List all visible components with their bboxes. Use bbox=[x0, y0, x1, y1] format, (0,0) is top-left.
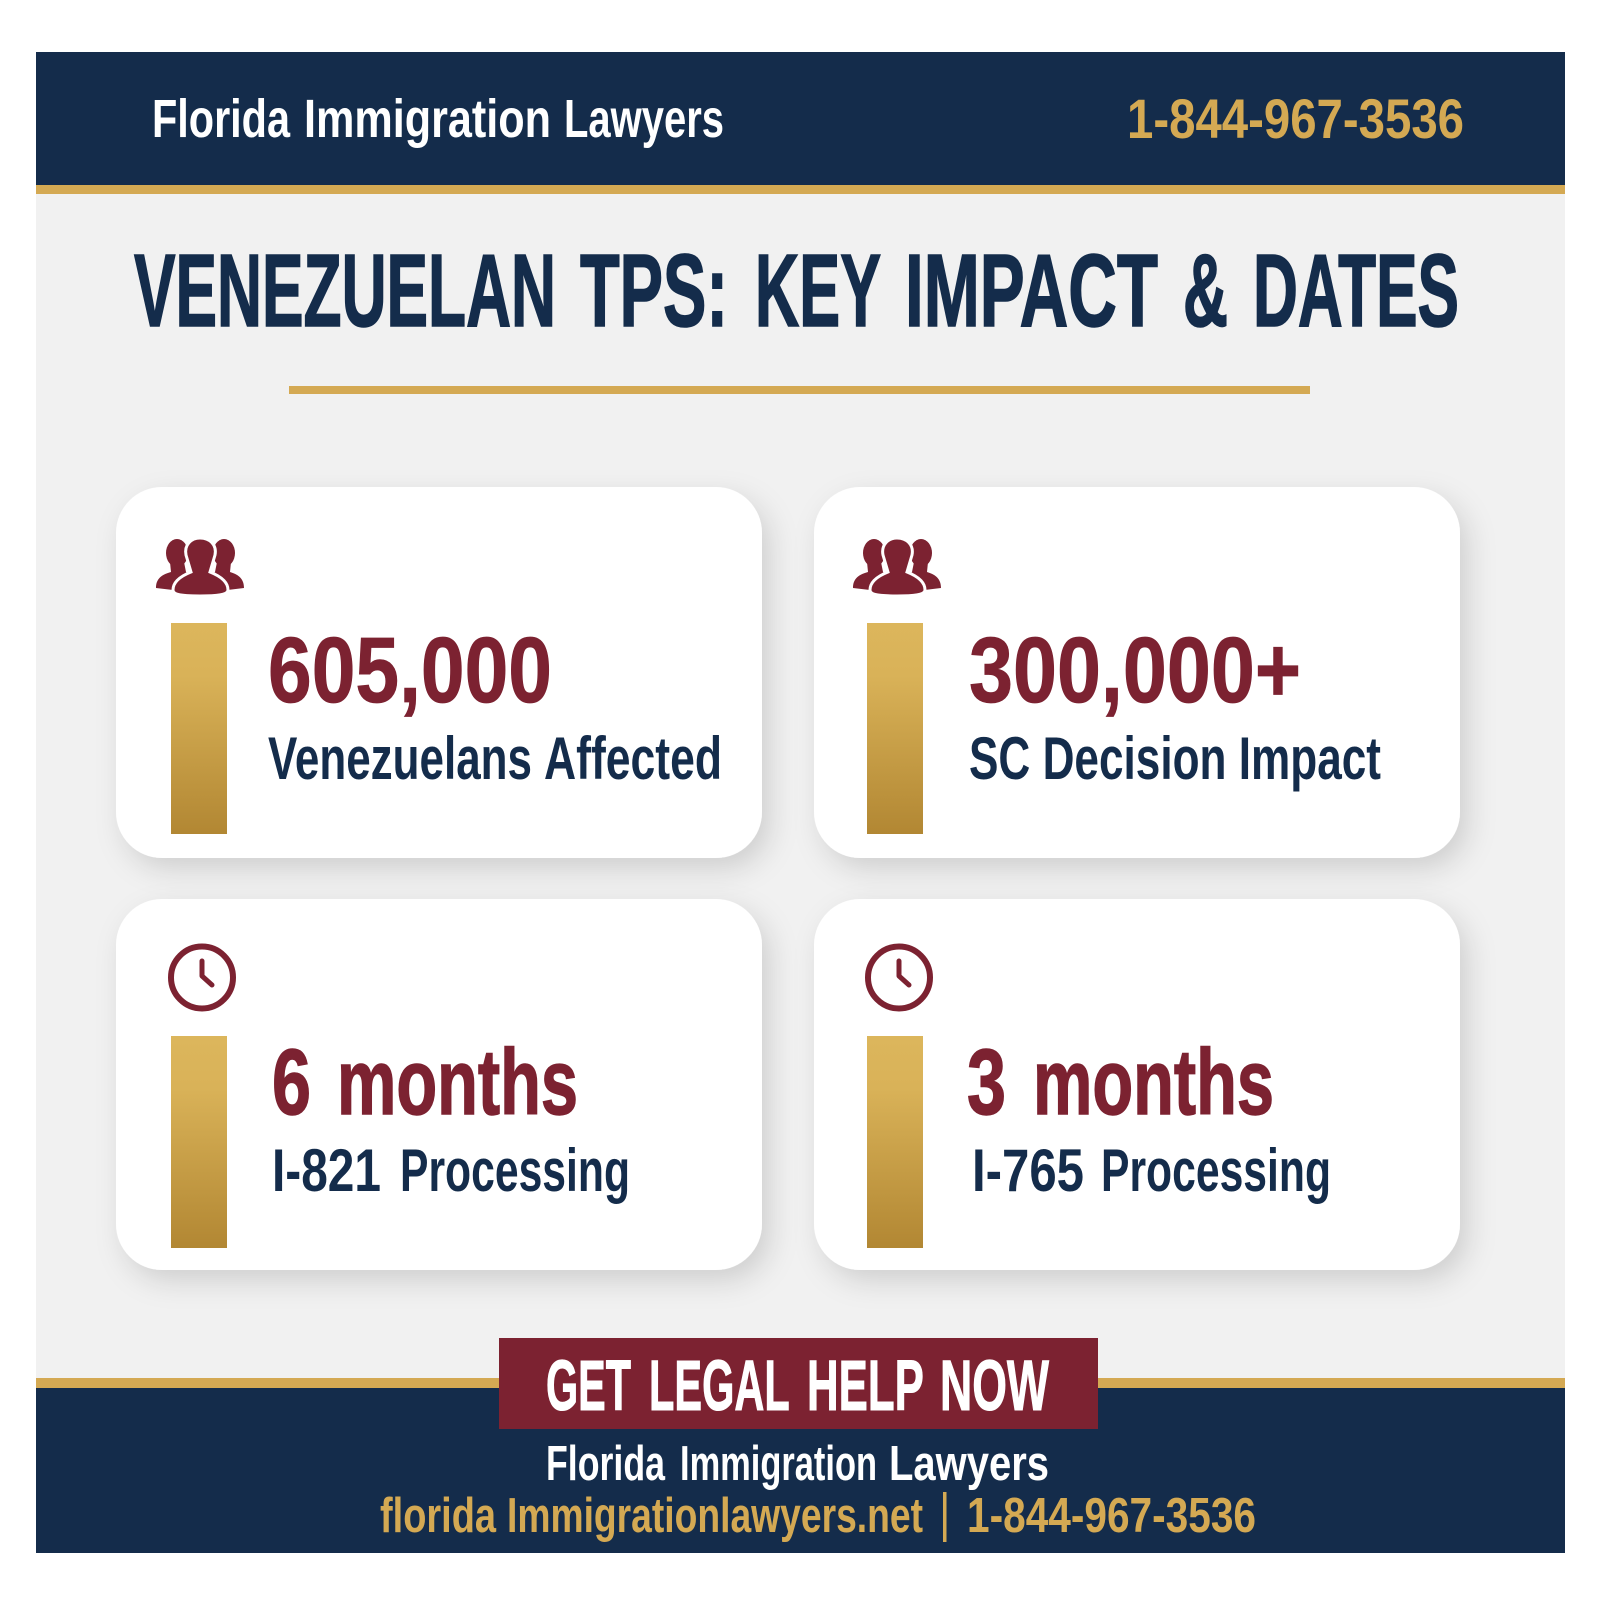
panel: 6 months I-821 processing bbox=[116, 899, 762, 1270]
footer website: florida bbox=[380, 1489, 497, 1543]
footer firm name: Florida bbox=[546, 1437, 666, 1491]
call to action banner: LEGAL bbox=[649, 1347, 789, 1426]
title: KEY bbox=[755, 233, 881, 348]
panel: 3 months I-765 processing bbox=[814, 899, 1460, 1270]
stat value: 3 bbox=[967, 1030, 1006, 1134]
title: IMPACT bbox=[905, 233, 1158, 348]
gold accent bar bbox=[867, 623, 923, 834]
stat label: SC Decision Impact bbox=[969, 725, 1381, 792]
header firm name: Immigration bbox=[304, 89, 551, 149]
stat value: 300,000+ bbox=[969, 618, 1301, 722]
title: & bbox=[1183, 233, 1228, 348]
stat value: 605,000 bbox=[268, 618, 552, 722]
stat label: Processing bbox=[400, 1137, 630, 1204]
call to action banner: NOW bbox=[940, 1347, 1049, 1426]
stat value: months bbox=[1033, 1030, 1274, 1134]
footer phone number: 1-844-967-3536 bbox=[967, 1489, 1256, 1543]
call to action banner: HELP bbox=[807, 1347, 923, 1426]
stat label: Venezuelans bbox=[268, 725, 532, 792]
stat value: months bbox=[337, 1030, 578, 1134]
icon: people bbox=[156, 538, 244, 596]
panel: 300,000+ SC decision impact bbox=[814, 487, 1460, 858]
stat label: Processing bbox=[1101, 1137, 1331, 1204]
title: VENEZUELAN bbox=[134, 233, 556, 348]
footer firm name: Immigration bbox=[680, 1437, 877, 1491]
header firm name: Lawyers bbox=[564, 89, 724, 149]
icon: clock bbox=[171, 946, 233, 1008]
stat label: I-765 bbox=[972, 1137, 1084, 1204]
footer firm name: Lawyers bbox=[889, 1437, 1049, 1491]
call to action banner bbox=[499, 1338, 1098, 1429]
icon: people bbox=[853, 538, 941, 596]
icon: clock bbox=[868, 946, 930, 1008]
header phone number: 1-844-967-3536 bbox=[1127, 87, 1464, 150]
footer website: Immigrationlawyers.net bbox=[507, 1489, 923, 1543]
title underline bbox=[289, 386, 1310, 394]
title: DATES bbox=[1253, 233, 1459, 348]
call to action banner: GET bbox=[546, 1347, 631, 1426]
header bar bbox=[36, 52, 1565, 194]
gold accent bar bbox=[867, 1036, 923, 1248]
header firm name: Florida bbox=[152, 89, 291, 149]
gold accent bar bbox=[171, 1036, 227, 1248]
stat value: 6 bbox=[272, 1030, 311, 1134]
panel: 605,000 Venezuelans affected bbox=[116, 487, 762, 858]
stat label: I-821 bbox=[272, 1137, 381, 1204]
stat label: Affected bbox=[544, 725, 722, 792]
footer separator bbox=[943, 1492, 946, 1542]
gold accent bar bbox=[171, 623, 227, 834]
footer bar bbox=[36, 1338, 1565, 1553]
title: TPS: bbox=[580, 233, 728, 348]
